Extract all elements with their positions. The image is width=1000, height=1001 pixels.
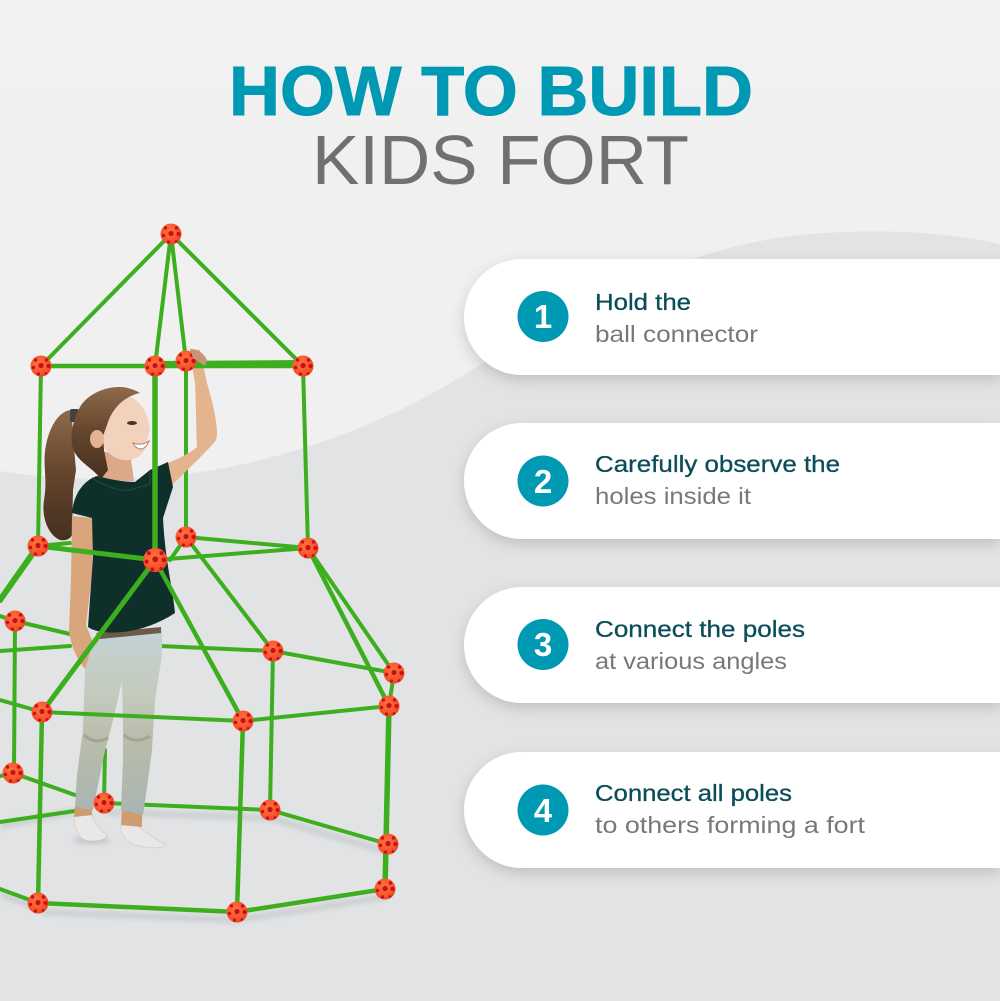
- title: [229, 52, 753, 199]
- step text: at various angles: [595, 648, 787, 674]
- panel: step 3: [464, 587, 1000, 703]
- title line 2: KIDS FORT: [312, 121, 689, 199]
- eye: [127, 421, 137, 425]
- floor shadows of fort: [0, 811, 388, 920]
- number: 3: [534, 626, 552, 663]
- neck: [98, 452, 134, 481]
- step heading: Connect all poles: [595, 780, 792, 806]
- card: [464, 423, 1000, 539]
- card: [464, 752, 1000, 868]
- fort: rear poles: [0, 234, 394, 844]
- hand over rear ball: [190, 349, 207, 366]
- belt: [96, 627, 161, 639]
- number badge: [518, 784, 568, 836]
- card: [464, 587, 1000, 703]
- panel: step 1: [464, 259, 1000, 375]
- raised arm: [168, 349, 217, 485]
- step text: holes inside it: [595, 483, 752, 509]
- step heading: Hold the: [595, 289, 691, 315]
- fort: ball connectors: [2, 224, 404, 922]
- left arm: [69, 516, 94, 672]
- girl: [43, 349, 217, 848]
- smile: [133, 441, 149, 449]
- jeans: [75, 630, 162, 815]
- step text: ball connector: [595, 321, 758, 347]
- sock shadows: [74, 837, 110, 843]
- ear: [90, 430, 104, 448]
- hair: [71, 387, 140, 479]
- panel: step 2: [464, 423, 1000, 539]
- face: [101, 394, 150, 460]
- number: 1: [534, 298, 552, 335]
- number badge: [518, 291, 568, 342]
- card: [464, 259, 1000, 375]
- shirt: [72, 462, 175, 633]
- step heading: Carefully observe the: [595, 451, 840, 477]
- step heading: Connect the poles: [595, 616, 805, 642]
- number: 4: [534, 792, 553, 829]
- number: 2: [534, 463, 552, 500]
- panel: step 4: [464, 752, 1000, 868]
- collar: [92, 470, 150, 490]
- ankles: [74, 806, 92, 817]
- title line 1: HOW TO BUILD: [229, 52, 753, 130]
- ponytail: [43, 410, 76, 540]
- fort: front poles: [0, 234, 394, 912]
- socks: [74, 815, 166, 848]
- hair tie: [70, 409, 79, 422]
- background curve: [0, 231, 1000, 1001]
- knee creases: [84, 735, 150, 741]
- number badge: [518, 619, 568, 670]
- number badge: [518, 456, 568, 506]
- step text: to others forming a fort: [595, 812, 866, 838]
